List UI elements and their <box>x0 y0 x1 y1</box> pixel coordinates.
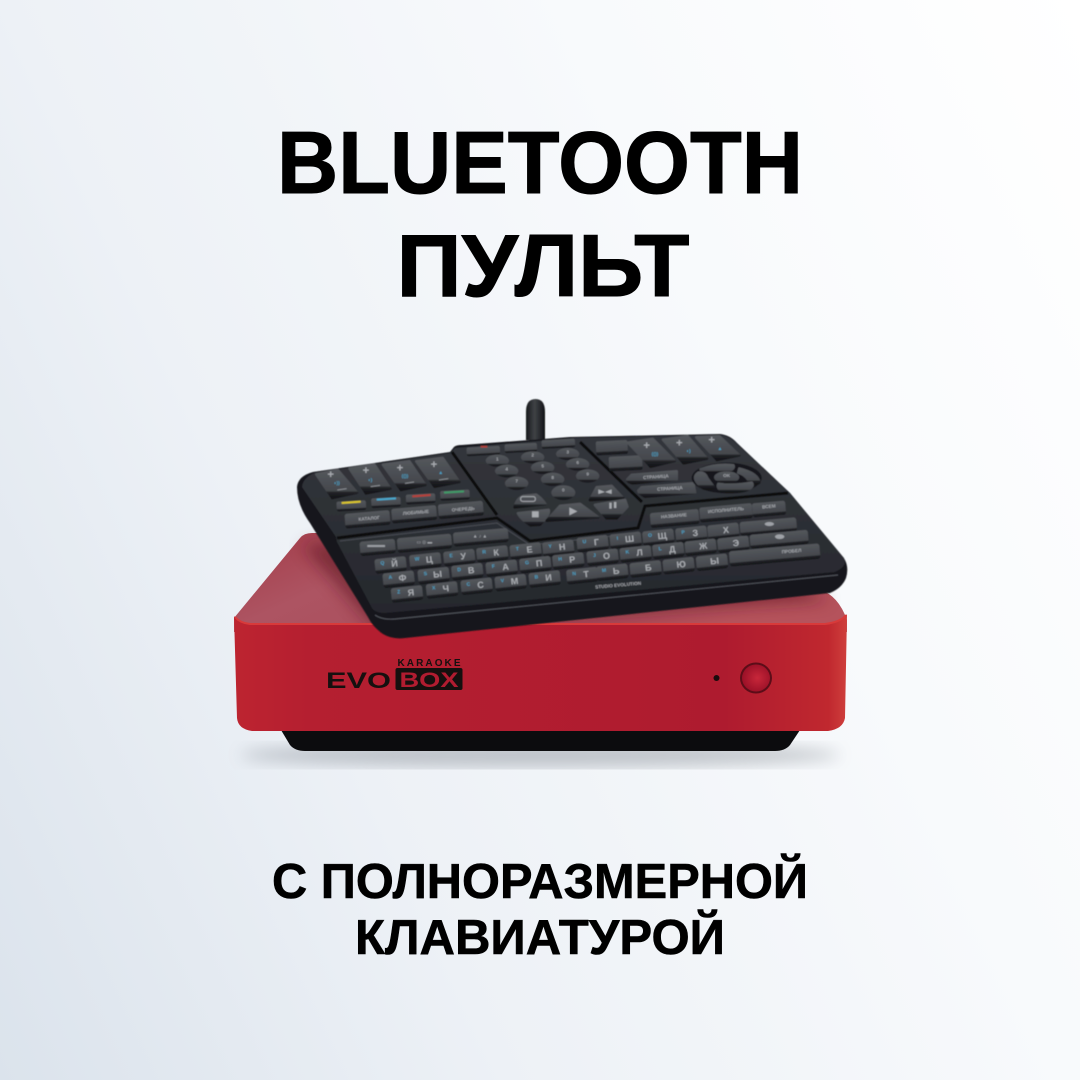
numeric keypad: 6 <box>576 460 579 465</box>
keyboard letter keys, right half: Ы <box>710 556 720 566</box>
d-pad <box>692 463 762 493</box>
right control keys: + <box>643 440 650 452</box>
keyboard letter keys, right half: Г <box>593 537 600 547</box>
keyboard media keys: ▭ ◎ ▬ <box>416 539 433 544</box>
keyboard letter keys, left half: Е <box>526 544 533 555</box>
keyboard letter keys, right half: З <box>692 528 699 538</box>
product: bluetooth remote with keyboard <box>297 399 847 638</box>
right control keys: ▲ <box>718 446 722 452</box>
keyboard letter keys, left half: В <box>467 565 475 576</box>
right control keys: + <box>676 438 683 450</box>
keyboard letter keys, right half: Л <box>636 547 643 558</box>
keyboard letter keys, left half: И <box>545 572 552 583</box>
keyboard letter keys, right half: Б <box>644 562 652 573</box>
logo: Evobox karaoke: EVO <box>326 668 391 693</box>
left volume rockers: + <box>327 469 334 481</box>
keyboard letter keys, left half: П <box>535 558 543 569</box>
keyboard letter keys, left half: Н <box>558 542 566 552</box>
antenna <box>526 399 545 440</box>
subtitle <box>272 854 808 965</box>
keyboard large keys: ПРОБЕЛ <box>781 548 802 555</box>
left volume rockers: ◖)) <box>333 481 340 487</box>
catalog keys: КАТАЛОГ <box>358 515 380 522</box>
keyboard letter keys, left half: А <box>502 562 510 572</box>
left volume rockers: + <box>363 465 370 477</box>
left volume rockers <box>316 458 459 498</box>
numeric keypad: 0 <box>562 488 565 493</box>
indicator LED <box>714 675 720 681</box>
panel grooves <box>337 442 788 541</box>
keyboard letter keys, right half: J <box>593 553 596 559</box>
left volume rockers: (()) <box>402 473 409 479</box>
subtitle: КЛАВИАТУРОЙ <box>355 910 725 965</box>
right control keys: ◖) <box>686 449 691 455</box>
catalog keys: ЛЮБИМЫЕ <box>403 509 429 516</box>
keyboard letter keys, right half: Ю <box>676 559 686 570</box>
top function keys <box>466 438 575 456</box>
d-pad: OK <box>723 473 731 478</box>
remote top plate <box>302 435 845 613</box>
keyboard large keys <box>729 517 820 567</box>
keyboard letter keys, left half: У <box>460 551 467 562</box>
keyboard letter keys, left half: F <box>492 564 495 570</box>
keyboard letter keys, right half: N <box>572 571 577 577</box>
product: karaoke box <box>234 533 847 767</box>
right control keys: + <box>708 434 715 446</box>
keyboard letter keys, left half: Р <box>569 554 576 565</box>
box front face <box>234 614 847 731</box>
remote shadow on box <box>302 533 830 628</box>
keyboard letter keys, right half: Д <box>668 544 677 555</box>
keyboard letter keys, left half: Ч <box>442 583 450 594</box>
numeric keypad: 8 <box>551 475 554 480</box>
keyboard letter keys, right half: P <box>681 530 686 536</box>
keyboard letter keys, left half: Ц <box>425 554 433 565</box>
keyboard letter keys, right half: K <box>625 549 630 556</box>
keyboard letter keys, left half: E <box>449 553 454 559</box>
box top surface <box>234 533 847 632</box>
keyboard letter keys, left half: Ы <box>433 569 443 580</box>
keyboard letter keys, right half: U <box>582 539 587 545</box>
keyboard letter keys, left half: Q <box>380 560 385 567</box>
keyboard letter keys, right half: Ь <box>612 566 620 576</box>
left volume rockers: + <box>431 459 438 471</box>
shadow under box <box>240 743 840 767</box>
box top highlight <box>235 615 846 624</box>
keyboard letter keys, left half: G <box>525 560 529 566</box>
keyboard letter keys, left half: H <box>558 556 563 563</box>
keyboard function keys: НАЗВАНИЕ <box>661 512 687 519</box>
keyboard media keys: ▲ ♪ ▲ <box>473 533 487 538</box>
keyboard letter keys, right half: О <box>603 551 611 561</box>
colour keys <box>336 490 470 511</box>
right control keys: СТРАНИЦА <box>643 473 669 480</box>
keyboard letter keys, left half: C <box>466 582 471 588</box>
keyboard letter keys, left half: W <box>414 556 420 563</box>
keyboard letter keys, right half: Щ <box>657 530 668 541</box>
keyboard letter keys, left half: T <box>516 546 519 553</box>
box foot <box>281 730 800 751</box>
keyboard function keys: ИСПОЛНИТЕЛЬ <box>708 506 745 514</box>
keyboard function keys: ВСЕМ <box>762 503 776 510</box>
keyboard letter keys, left half: S <box>423 571 428 577</box>
keyboard letter keys, right half: Ш <box>625 533 635 544</box>
numeric keypad: 2 <box>531 453 534 458</box>
logo: Evobox karaoke <box>326 658 462 693</box>
numeric keypad: 3 <box>566 449 569 454</box>
front lip highlight <box>375 575 838 619</box>
keyboard function keys <box>650 501 786 528</box>
left volume rockers: ▲ <box>438 470 443 476</box>
keyboard letter keys, right half: I <box>616 536 619 542</box>
remote body <box>297 434 847 638</box>
keyboard letter keys, left half <box>374 539 585 603</box>
title: ПУЛЬТ <box>396 216 690 315</box>
keyboard letter keys, left half: V <box>500 578 505 584</box>
numeric keypad: 1 <box>496 457 499 462</box>
keyboard letter keys, left half: B <box>534 574 539 581</box>
keyboard letter keys, right half: M <box>602 568 607 574</box>
right control keys: СТРАНИЦА <box>657 485 683 492</box>
catalog keys: ОЧЕРЕДЬ <box>452 506 475 513</box>
keyboard letter keys, left half: X <box>432 585 436 592</box>
subtitle: С ПОЛНОРАЗМЕРНОЙ <box>272 854 808 909</box>
keyboard letter keys, right half <box>566 522 750 585</box>
keyboard letter keys, left half: М <box>510 576 519 587</box>
keyboard letter keys, left half: С <box>477 580 485 590</box>
numeric keypad: 4 <box>505 467 508 472</box>
right section keys <box>566 434 820 590</box>
keyboard letter keys, left half: D <box>457 567 462 573</box>
right control keys: (()) <box>652 451 659 457</box>
logo: Evobox karaoke: KARAOKE <box>398 658 461 669</box>
keyboard letter keys, left half: A <box>388 575 393 581</box>
catalog keys <box>344 501 484 529</box>
left section keys <box>316 438 627 603</box>
keyboard letter keys, left half: Ф <box>398 573 407 583</box>
keyboard letter keys, left half: R <box>482 549 487 556</box>
numeric keypad: 9 <box>586 471 589 476</box>
numeric keypad: 5 <box>541 463 544 468</box>
keyboard letter keys, right half: Ж <box>698 541 709 552</box>
logo: Evobox karaoke: BOX <box>400 669 458 692</box>
keyboard letter keys, left half: Z <box>397 589 401 596</box>
keyboard media keys <box>359 528 509 556</box>
transport keys <box>515 486 627 525</box>
keyboard letter keys, right half: L <box>658 546 662 552</box>
keyboard letter keys, right half: Э <box>732 538 740 548</box>
numeric keypad: 7 <box>515 479 518 484</box>
numeric keypad <box>486 448 599 500</box>
keyboard letter keys, left half: Я <box>407 587 415 598</box>
power button <box>740 662 772 694</box>
keyboard letter keys, right half: Х <box>722 525 729 535</box>
keyboard letter keys, left half: Y <box>548 544 553 550</box>
keyboard letter keys, left half: К <box>493 547 500 558</box>
brand label: STUDIO EVOLUTION <box>595 581 642 590</box>
left volume rockers: ◖) <box>368 477 373 483</box>
keyboard letter keys, right half: O <box>648 533 652 539</box>
right control keys <box>596 434 739 497</box>
panel edge highlight <box>340 523 640 545</box>
title <box>277 113 803 315</box>
keyboard letter keys, right half: Т <box>583 569 590 580</box>
keyboard letter keys, left half: Й <box>391 557 398 569</box>
title: BLUETOOTH <box>277 113 803 212</box>
left volume rockers: + <box>397 462 404 474</box>
